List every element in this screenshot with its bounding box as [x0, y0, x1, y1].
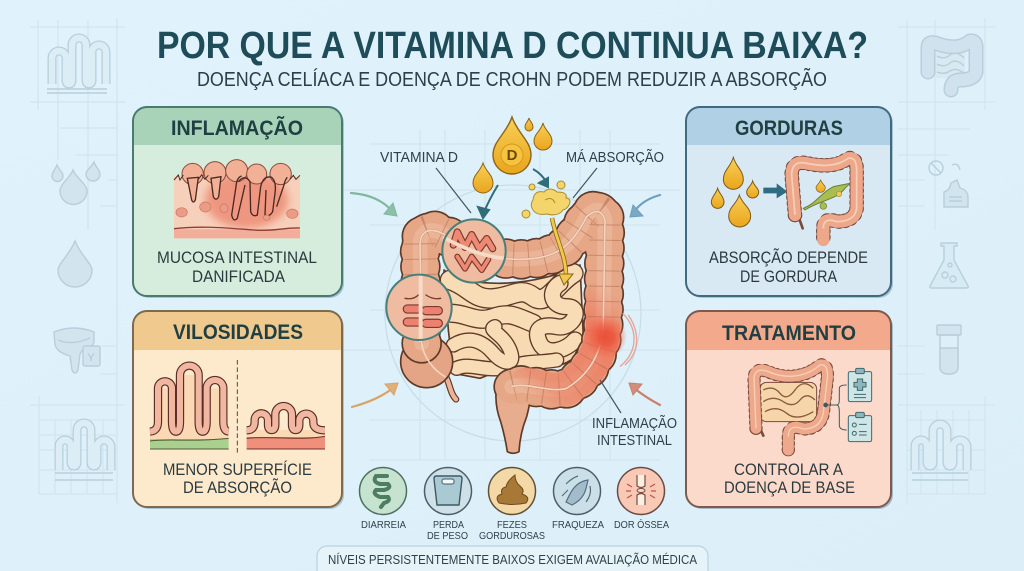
icon: small drops: [473, 118, 552, 193]
arrow: inflamação to center: [351, 193, 397, 216]
symptom: fezes gordurosas: [479, 468, 545, 542]
vitamin D drops: [473, 117, 552, 193]
symptom: fraqueza: FRAQUEZA: [552, 519, 604, 531]
illustration: fat drops and colon: [711, 157, 857, 240]
illustration: colon with clipboards: [754, 365, 872, 450]
background icons left: [47, 38, 113, 480]
icon: villi bottom left: [55, 423, 113, 480]
heading: gorduras: GORDURAS: [735, 117, 843, 140]
label: vitamina D: VITAMINA D: [380, 149, 458, 166]
icon: large drop: [58, 241, 92, 287]
label: inflamação intestinal: [592, 380, 677, 449]
icon: main vitamin D drop: D: [507, 147, 518, 164]
illustration: damaged mucosa: [174, 160, 300, 238]
label: má absorção: MÁ ABSORÇÃO: [566, 149, 664, 166]
text: menor superfície de absorção: [163, 460, 312, 497]
text: menor superfície de absorção: MENOR SUPERFÍCIE: [163, 460, 312, 479]
arrows: vitamin D into gut: [478, 169, 548, 218]
icon: colon: [928, 41, 976, 90]
magnifier: villi upper: [442, 219, 506, 283]
small intestine: [444, 265, 583, 378]
symptom icons: [360, 468, 669, 542]
icon: villi top left: [47, 38, 107, 93]
text: mucosa intestinal danificada: DANIFICADA: [192, 268, 285, 286]
label: inflamação intestinal: INTESTINAL: [597, 432, 672, 449]
icon: test tube: [937, 325, 961, 374]
arrow: yellow to small intestine: [552, 218, 573, 285]
label: inflamação intestinal: INFLAMAÇÃO: [592, 415, 677, 432]
text: controlar a doença de base: DOENÇA DE BASE: [724, 479, 855, 497]
rectum: [496, 377, 530, 453]
fat clump: [522, 181, 570, 218]
symptom: fraqueza: [552, 468, 604, 531]
text: controlar a doença de base: [724, 461, 855, 497]
heading: vilosidades: VILOSIDADES: [173, 321, 303, 344]
label: má absorção: [566, 149, 664, 198]
text: mucosa intestinal danificada: MUCOSA INTESTINAL: [157, 249, 317, 267]
symptom: dor óssea: DOR ÓSSEA: [614, 518, 669, 531]
symptom: perda de peso: PERDA: [433, 519, 464, 531]
panel: inflamação: [133, 107, 344, 298]
symptom: fezes gordurosas: GORDUROSAS: [479, 530, 545, 542]
arrow: tratamento to center: [629, 383, 660, 405]
icon: intestine with label: Y: [87, 352, 95, 364]
central intestine diagram: [386, 210, 637, 453]
symptom: diarreia: DIARREIA: [361, 519, 406, 531]
heading: tratamento: TRATAMENTO: [722, 322, 856, 345]
icon: intestine with label: [54, 328, 100, 373]
text: absorção depende de gordura: ABSORÇÃO DEPENDE: [709, 247, 868, 267]
heading: inflamação: INFLAMAÇÃO: [171, 117, 303, 140]
icon: three drops: [52, 162, 100, 204]
background icons right: [912, 41, 976, 480]
footer callout: [317, 546, 708, 571]
magnifier: villi left: [386, 275, 452, 340]
arrow: gorduras to center: [630, 195, 660, 217]
inflamed area: [583, 313, 637, 367]
symptom: fezes gordurosas: FEZES: [497, 519, 527, 531]
icon: flask: [930, 243, 968, 288]
panel: tratamento: [686, 311, 893, 509]
symptom: perda de peso: DE PESO: [427, 530, 468, 542]
arrow: vilosidades to center: [352, 383, 398, 407]
icon: villi bottom right: [912, 424, 968, 480]
panel: vilosidades: [133, 311, 344, 509]
text: absorção depende de gordura: DE GORDURA: [740, 268, 837, 286]
text: menor superfície de absorção: DE ABSORÇÃO: [183, 477, 292, 497]
symptom: diarreia: [360, 468, 406, 531]
symptom: dor óssea: [614, 468, 669, 531]
symptom: perda de peso: [424, 468, 472, 542]
appendix: [445, 375, 456, 399]
icon: pill and jar: [929, 161, 968, 207]
text: absorção depende de gordura: [709, 247, 868, 286]
large intestine: [401, 210, 605, 453]
label: vitamina D: [380, 149, 471, 213]
text: controlar a doença de base: CONTROLAR A: [734, 461, 843, 479]
footer callout: NÍVEIS PERSISTENTEMENTE BAIXOS EXIGEM AVALIAÇÃO MÉDICA: [328, 552, 697, 567]
illustration: healthy and damaged villi: [150, 360, 325, 453]
panel: gorduras: [686, 107, 893, 298]
title: POR QUE A VITAMINA D CONTINUA BAIXA?: [157, 25, 868, 67]
subtitle: DOENÇA CELÍACA E DOENÇA DE CROHN PODEM REDUZIR A ABSORÇÃO: [197, 67, 827, 91]
text: mucosa intestinal danificada: [157, 249, 317, 286]
